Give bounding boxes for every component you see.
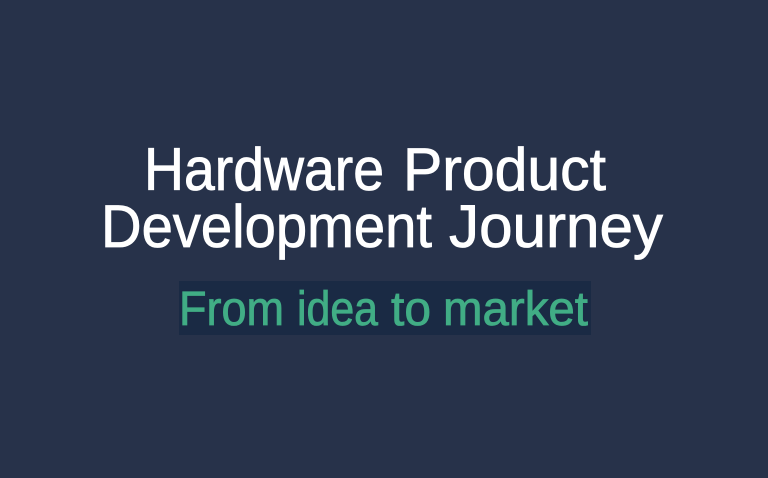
title: Development: [101, 193, 432, 260]
title: Hardware: [144, 136, 384, 203]
subtitle highlight: idea: [297, 283, 378, 336]
subtitle highlight: to: [391, 283, 431, 336]
subtitle highlight: From: [179, 283, 284, 336]
title: Journey: [449, 193, 663, 260]
title: Product: [403, 136, 606, 203]
subtitle highlight: market: [443, 283, 588, 336]
title: [101, 136, 663, 260]
subtitle highlight: [179, 281, 591, 336]
